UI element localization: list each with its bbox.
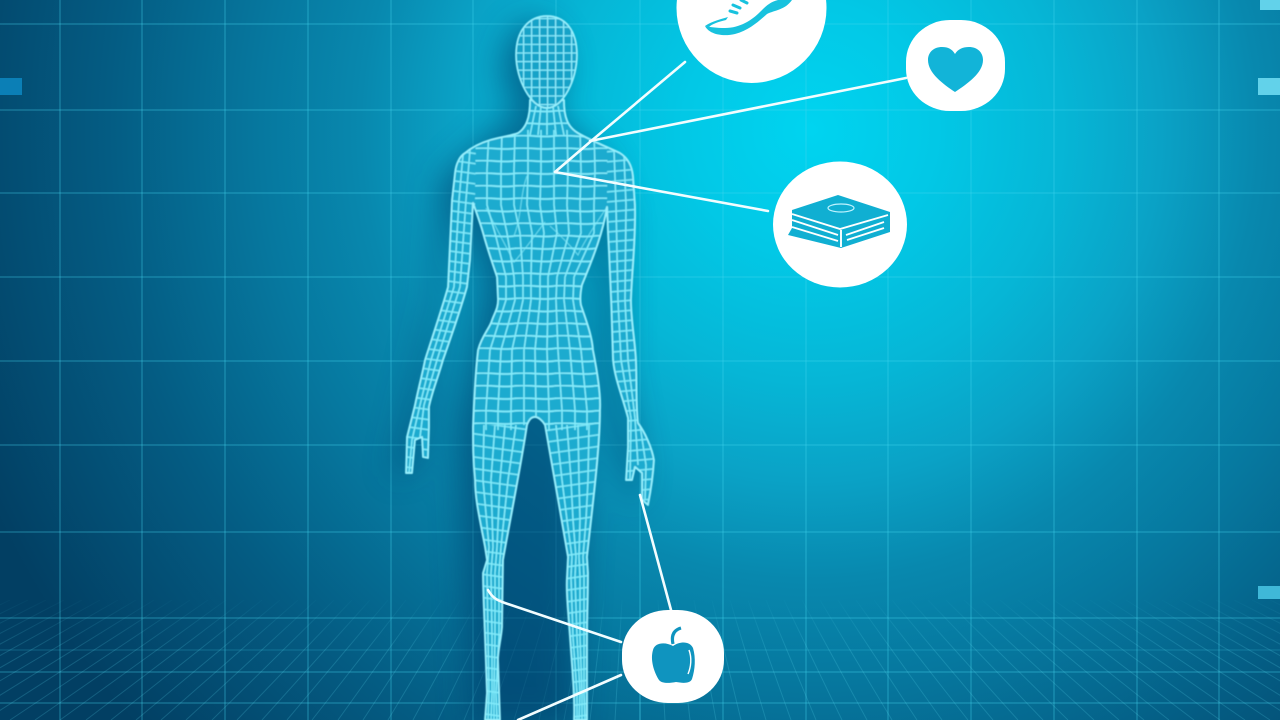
icon: book [788, 195, 890, 248]
icon: heart [928, 47, 983, 92]
connector: shoe [555, 62, 685, 172]
side marker: left [0, 78, 22, 95]
icon badge: book [773, 162, 907, 288]
wireframe human figure [390, 16, 670, 720]
side marker: upper right [1258, 78, 1280, 95]
connector lines [488, 62, 906, 720]
connector: apple to lower leg [518, 675, 621, 720]
chest contour lines [486, 176, 607, 262]
connector: book [555, 172, 768, 211]
body mesh [406, 100, 654, 720]
icon: apple [652, 628, 695, 683]
icon badge: heart [906, 20, 1005, 111]
connector: heart [590, 78, 906, 141]
head [516, 16, 577, 108]
perspective floor grid [0, 600, 1280, 720]
connector: leg to apple [488, 590, 621, 642]
connector: hand to apple [640, 495, 671, 610]
side marker: lower right [1258, 586, 1280, 599]
icon: shoe [705, 0, 792, 35]
side marker: top right edge [1260, 0, 1280, 10]
icon badge: apple [622, 610, 724, 703]
figure shadow [392, 22, 640, 720]
icon badge: running shoe [676, 0, 826, 83]
body outline [406, 100, 654, 720]
